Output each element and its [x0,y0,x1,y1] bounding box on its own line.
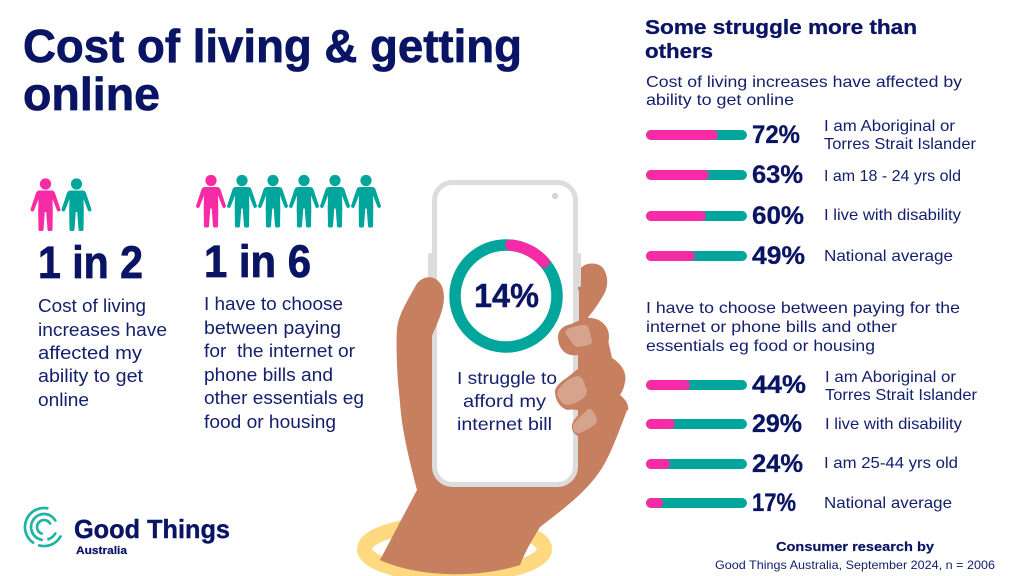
illustration: hand holding phone [364,182,628,575]
panel: cost of living effect chart [646,74,977,270]
bar row: 72%: Torres Strait Islander [824,136,977,153]
text block: chart 2 heading: I have to choose between paying for the [646,300,960,317]
source note: Good Things Australia, September 2024, n = 2006 [715,558,995,572]
text block: chart 1 heading [646,74,962,109]
bar row: 60% [646,202,961,230]
bar row: 60%: I live with disability [824,207,961,224]
text block: 1 in 6 description: phone bills and [204,365,333,385]
bar row: 24% [646,450,958,478]
bar row: 44%: 44% [752,371,806,399]
bar row: 63%: 63% [752,161,803,189]
heading: 1 in 6: 1 in 6 [204,236,311,287]
text block: 1 in 2 description: affected my [38,343,142,363]
text block: 1 in 6 description: between paying [204,318,341,338]
icon: yellow bangle [364,523,544,575]
text block: 1 in 2 description: Cost of living [38,296,146,316]
bar row: 44%: I am Aboriginal or [825,369,957,386]
chart: 14% donut: 14% [474,277,539,314]
bar row: 44% [646,369,978,404]
text block: 1 in 2 description: ability to get [38,366,143,386]
bar row: 17% [646,489,952,517]
panel: 1 in 2 statistic [30,178,167,410]
title [23,20,522,120]
text block: phone caption: I struggle to [457,368,557,388]
bar row: 24%: I am 25-44 yrs old [824,455,958,472]
bar row: 44%: Torres Strait Islander [825,387,978,404]
icon: fingers with nails [555,318,628,436]
panel: choosing between bills and essentials chart [646,300,978,517]
bar row: 49%: 49% [752,242,805,270]
source note: Consumer research by [776,539,935,554]
bar row: 63% [646,161,961,189]
chart: 14% donut [455,245,557,347]
text block: 1 in 6 description [204,294,364,432]
bar row: 49%: National average [824,248,953,265]
icon: 1 pink and 5 teal people [196,175,381,228]
bar row: 24%: 24% [752,450,803,478]
logo: Good Things Australia: Good Things [74,514,230,544]
bar row: 72%: 72% [752,121,800,149]
text block: phone caption: afford my [463,391,546,411]
title: Cost of living & getting [23,20,522,72]
text block: phone caption [457,368,557,434]
bar row: 29%: I live with disability [825,416,962,433]
heading: some struggle more than others: others [645,41,713,63]
icon: hand palm [380,264,628,574]
title: online [23,68,160,120]
logo: Good Things Australia: Australia [76,545,128,557]
text block: chart 2 heading [646,300,960,355]
panel: 1 in 6 statistic [196,175,381,432]
text block: 1 in 6 description: I have to choose [204,294,343,314]
bar row: 72% [646,118,977,153]
text block: 1 in 2 description: increases have [38,320,167,340]
icon: concentric arcs [25,508,60,546]
text block: 1 in 6 description: food or housing [204,412,336,432]
text block: 1 in 2 description [38,296,167,410]
source note [715,539,995,572]
icon: 1 pink and 1 teal person [30,178,92,231]
bar row: 60%: 60% [752,202,804,230]
bar row: 72%: I am Aboriginal or [824,118,956,135]
icon: thumb [397,277,444,400]
text block: 1 in 6 description: other essentials eg [204,388,364,408]
heading: some struggle more than others: Some struggle more than [645,17,917,39]
text block: chart 2 heading: internet or phone bills and other [646,319,898,336]
text block: 1 in 6 description: for the internet or [204,341,355,361]
text block: phone caption: internet bill [457,414,552,434]
text block: 1 in 2 description: online [38,390,89,410]
bar row: 29%: 29% [752,410,802,438]
icon: phone [428,182,581,484]
logo: Good Things Australia [25,508,230,557]
heading: some struggle more than others [645,17,917,63]
text block: chart 1 heading: ability to get online [646,92,794,109]
bar row: 29% [646,410,962,438]
bar row: 17%: 17% [752,489,796,517]
bar row: 17%: National average [824,495,952,512]
text block: chart 2 heading: essentials eg food or housing [646,338,875,355]
text block: chart 1 heading: Cost of living increases have affected by [646,74,962,91]
bar row: 63%: I am 18 - 24 yrs old [824,168,961,185]
heading: 1 in 2: 1 in 2 [38,237,143,288]
bar row: 49% [646,242,953,270]
